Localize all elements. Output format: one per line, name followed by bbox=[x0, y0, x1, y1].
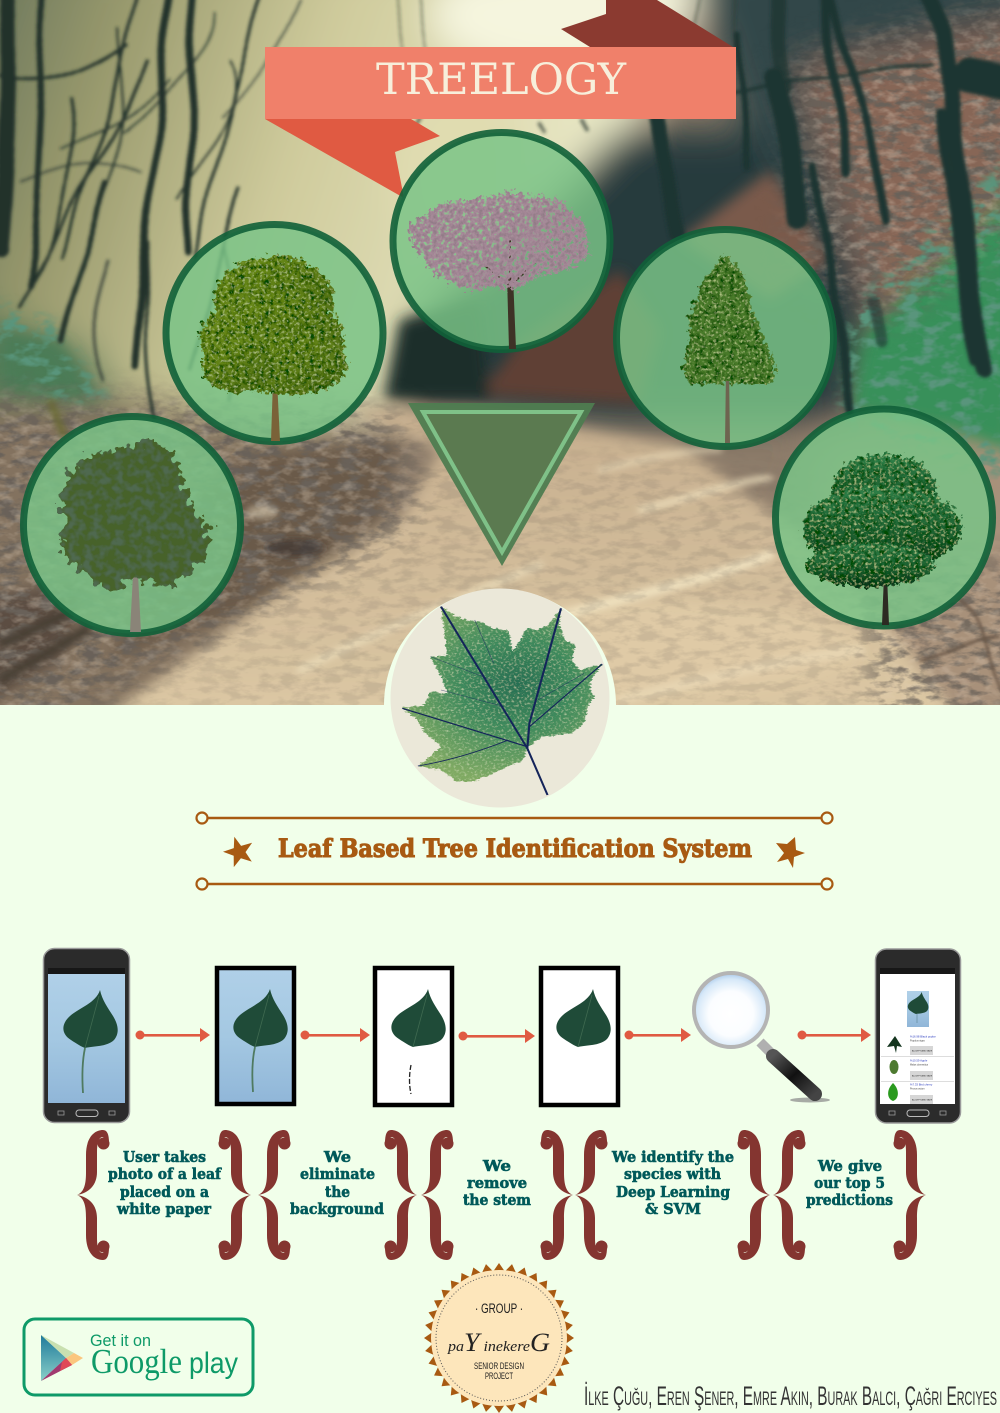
caption 4 with braces bbox=[575, 1130, 770, 1260]
caption 1 with braces: white paper bbox=[116, 1200, 212, 1218]
caption 4 with braces: We identify the bbox=[611, 1148, 734, 1166]
result row 1: ACCEPT AND SAVE bbox=[912, 1050, 933, 1052]
heading: Leaf Based Tree Identification System bbox=[278, 834, 752, 863]
road streaks bbox=[300, 450, 860, 700]
group seal badge: paY inekereG bbox=[447, 1328, 550, 1357]
result row 1: %16.98 Black poplar bbox=[910, 1034, 936, 1038]
result row 3: %7.33 Bird cherry bbox=[910, 1082, 933, 1086]
result row 2: ACCEPT AND SAVE bbox=[912, 1074, 933, 1078]
mottling: leaf litter highlights bbox=[0, 0, 1000, 705]
rocks and logs bbox=[0, 400, 325, 680]
leaf illustration bbox=[402, 607, 602, 795]
caption 1 with braces: photo of a leaf bbox=[108, 1165, 222, 1183]
result row 2 bbox=[890, 1058, 933, 1080]
arrow 5 bbox=[798, 1028, 871, 1042]
caption 5 with braces: predictions bbox=[806, 1191, 893, 1209]
triangle arrow pointing down bbox=[408, 403, 595, 566]
bottom rule bbox=[196, 878, 832, 890]
group seal badge: PROJECT bbox=[485, 1371, 513, 1382]
caption 2 with braces: the bbox=[325, 1183, 350, 1201]
group seal badge: · GROUP · bbox=[475, 1301, 523, 1316]
result row 1: Populus nigra bbox=[910, 1040, 925, 1042]
caption 1 with braces: User takes bbox=[123, 1148, 206, 1166]
phone: photo of leaf bbox=[44, 948, 130, 1122]
mottling: leaf litter bbox=[0, 0, 1000, 705]
tree circle: slim green tree bbox=[616, 230, 834, 446]
group seal badge bbox=[419, 1258, 579, 1413]
leaf circle bbox=[384, 588, 616, 808]
result row 2: %10.59 Apple bbox=[910, 1058, 928, 1062]
frame: background eliminated input bbox=[217, 968, 294, 1104]
caption 5 with braces: We give bbox=[817, 1157, 882, 1175]
result row 3: ACCEPT AND SAVE bbox=[912, 1098, 933, 1102]
background photo: forest road bbox=[0, 0, 1000, 720]
frame: leaf on white with stem bbox=[375, 968, 452, 1105]
result row 1 bbox=[887, 1034, 936, 1055]
heading band bbox=[196, 812, 832, 890]
caption 4 with braces: species with bbox=[624, 1165, 721, 1183]
caption 5 with braces bbox=[773, 1130, 926, 1260]
result row 3: Prunus avium bbox=[910, 1088, 925, 1090]
caption 1 with braces bbox=[77, 1130, 251, 1260]
google play badge: Get it on bbox=[90, 1331, 151, 1350]
ribbon: top-right fold bbox=[561, 0, 733, 47]
arrow 4 bbox=[624, 1028, 691, 1042]
star left bbox=[223, 837, 252, 867]
google play badge bbox=[24, 1319, 253, 1395]
caption 1 with braces: placed on a bbox=[120, 1183, 209, 1201]
caption 2 with braces: We bbox=[323, 1148, 351, 1166]
star right bbox=[776, 837, 805, 868]
icon: magnifying glass bbox=[694, 973, 830, 1102]
caption 2 with braces: eliminate bbox=[300, 1165, 375, 1183]
uploaded image thumbnail bbox=[907, 991, 929, 1027]
tree circle: olive round tree bbox=[166, 224, 383, 442]
caption 5 with braces: our top 5 bbox=[814, 1174, 885, 1192]
caption 2 with braces: background bbox=[290, 1200, 384, 1218]
caption 3 with braces: the stem bbox=[463, 1191, 531, 1209]
phone: top 5 predictions bbox=[876, 949, 960, 1123]
ribbon: bottom-left fold bbox=[265, 119, 440, 198]
caption 3 with braces: We bbox=[482, 1157, 511, 1175]
icon: play triangle bbox=[41, 1335, 83, 1381]
group seal badge: SENIOR DESIGN bbox=[474, 1361, 524, 1372]
mottling: grass bbox=[0, 162, 1000, 480]
caption 2 with braces bbox=[258, 1130, 417, 1260]
title: TREELOGY bbox=[376, 55, 627, 105]
google play badge: play bbox=[189, 1347, 238, 1380]
caption 4 with braces: & SVM bbox=[645, 1200, 701, 1218]
google play badge: Google bbox=[91, 1342, 182, 1381]
result row 2: Malus domestica bbox=[910, 1064, 929, 1066]
ribbon: main banner with title bbox=[265, 47, 736, 119]
arrow 1 bbox=[136, 1028, 210, 1042]
tree circle: pink blossom tree bbox=[393, 132, 610, 350]
caption 4 with braces: Deep Learning bbox=[616, 1183, 730, 1201]
tree circle: conifer tree bbox=[24, 416, 240, 634]
result row 3 bbox=[888, 1082, 933, 1104]
tree circle: dark green tree bbox=[776, 409, 992, 626]
caption 3 with braces: remove bbox=[467, 1174, 527, 1192]
arrow 3 bbox=[458, 1029, 535, 1043]
frame: leaf without stem bbox=[541, 968, 618, 1105]
top rule bbox=[196, 812, 832, 824]
caption 3 with braces bbox=[421, 1130, 573, 1260]
mottling: road bbox=[161, 453, 885, 705]
arrow 2 bbox=[300, 1028, 370, 1042]
